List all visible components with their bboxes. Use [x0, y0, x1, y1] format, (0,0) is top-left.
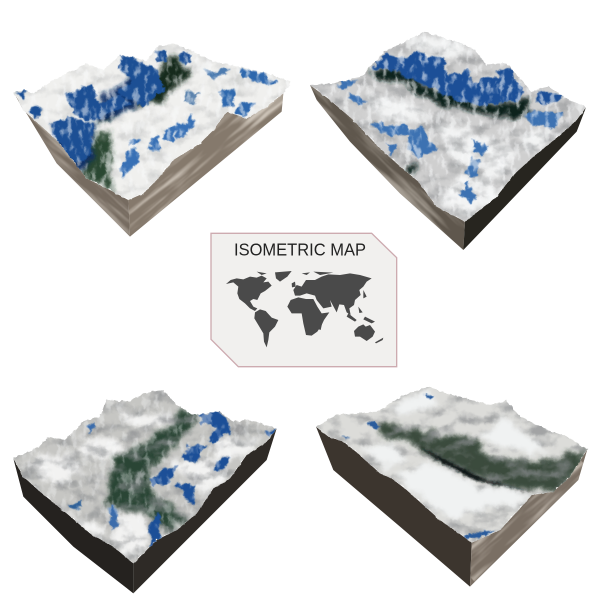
world map [226, 271, 383, 347]
left cliff face [310, 85, 465, 250]
blue rock faces [68, 412, 277, 547]
title: ISOMETRIC MAP [234, 240, 366, 260]
grey mottling [7, 387, 283, 567]
right cliff face [128, 93, 283, 237]
panel: map card [211, 233, 397, 367]
terrain block: top left [14, 44, 290, 236]
terrain block: bottom left [7, 387, 283, 593]
left cliff face [13, 92, 130, 237]
bright snowfields [362, 390, 550, 520]
snow patches [367, 33, 557, 218]
forested valley [380, 422, 587, 492]
blue rock faces [15, 48, 277, 178]
right face strata [470, 460, 584, 582]
deep blue shade [50, 80, 160, 170]
surface [7, 387, 283, 567]
card background [211, 233, 397, 367]
grey mottling [316, 387, 588, 542]
snow streaks [14, 390, 276, 560]
snow streaks [28, 46, 288, 191]
valley shadow [417, 445, 540, 493]
right cliff face [463, 107, 586, 250]
terrain block: bottom right [316, 386, 588, 586]
snow patches [27, 410, 263, 560]
grey mottling [14, 44, 286, 198]
right cliff face [470, 449, 587, 587]
blue accents [340, 393, 497, 541]
forested valley [78, 53, 190, 193]
forested valley [103, 410, 197, 530]
mottled surface [307, 28, 590, 228]
left face strata [310, 86, 465, 234]
snow surface [14, 44, 290, 200]
forested valley [365, 70, 533, 180]
snow streaks [322, 32, 584, 221]
right cliff face [133, 428, 277, 593]
left cliff face [13, 458, 133, 593]
right face strata [129, 94, 283, 228]
left face strata [16, 98, 130, 236]
grey mottling [310, 38, 574, 220]
left cliff face [316, 427, 472, 587]
surface [316, 386, 588, 542]
blue rock faces [335, 52, 563, 203]
terrain block: top right [310, 32, 586, 250]
